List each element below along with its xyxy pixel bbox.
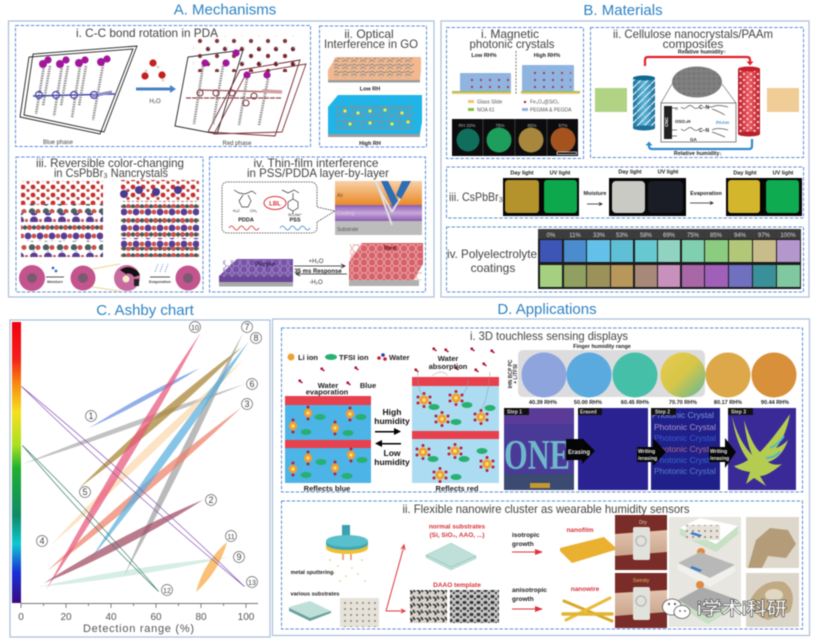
photo: Step 2 Photonic Crystal writing: Photonic Cryst <box>654 455 710 465</box>
diagram: low humidity device reflecting blue: evaporation <box>306 388 349 396</box>
numbered material markers <box>36 322 262 596</box>
heading: Cellulose nanocrystals composites: composites <box>663 37 723 51</box>
heading: Cellulose nanocrystals composites <box>613 27 773 51</box>
panel: B Materials frame <box>441 21 809 297</box>
colour grid: RH 0 to 100 percent: 53% <box>616 233 629 239</box>
heading: Magnetic photonic crystals <box>470 27 554 51</box>
photo: Step 2 Photonic Crystal writing: Step 2 <box>655 410 670 416</box>
diagram: chemical structure inset: C−N <box>699 128 710 134</box>
arrow: Writing erasing 1 <box>637 438 666 466</box>
label: Relative humidity up: Relative humidity↑ <box>678 50 726 56</box>
label: isotropic growth: isotropic <box>512 532 540 539</box>
sub-panel: B-ii Cellulose nanocrystals/PAAm <box>590 27 804 158</box>
icon: sputtering target <box>326 525 368 582</box>
label: Reflects blue: Reflects blue <box>304 484 350 493</box>
colour grid: RH 0 to 100 percent: 75% <box>687 233 700 239</box>
diagram: thin-film layers with light beams: Coating <box>337 211 354 217</box>
arrow: Writing erasing 1: /erasing <box>638 456 657 462</box>
diagram: purple film: Purple <box>255 261 275 268</box>
diagram: high and low humidity arrows: Low <box>384 448 401 458</box>
diagram: normal substrate <box>426 543 476 570</box>
colour grid: RH 0 to 100 percent: 97% <box>758 233 771 239</box>
photos: colour at four RH levels: 75% <box>495 123 505 128</box>
callout: PDDA and PSS chemical structures <box>222 182 335 233</box>
callout: PDDA and PSS chemical structures: PDDA <box>238 218 254 224</box>
arrow: Writing erasing 2: Writing <box>710 449 727 455</box>
panel: A Mechanisms frame <box>8 21 434 297</box>
heading: Flexible nanowire cluster: ii. Flexible nanowire cluster as wearable humidity sensors <box>402 502 690 516</box>
label: H2O: H₂O <box>149 99 161 105</box>
sub-panel: B-iii CsPbBr3 <box>446 167 804 218</box>
heading: C-C bond rotation: i. C-C bond rotation in PDA <box>76 26 218 40</box>
legend: Li ion, TFSI ion, water: TFSI ion <box>339 353 369 362</box>
heading: Thin-film interference: in PSS/PDDA layer-by-layer <box>247 166 389 180</box>
arrow: Writing erasing 2 <box>709 438 736 468</box>
diagram: high humidity device reflecting red: Water <box>438 354 458 363</box>
chart: finger humidity colour circles: 60.45 RH% <box>621 400 649 406</box>
photo: Step 3 eagle: Step 3 <box>731 410 746 416</box>
callout: PDDA and PSS chemical structures: H₃C <box>233 209 240 213</box>
label: Reflects red: Reflects red <box>436 484 479 493</box>
diagram: low humidity device reflecting blue: Water <box>318 381 338 390</box>
arrow: anisotropic <box>512 606 543 612</box>
chart outline leaf 13 <box>19 384 247 589</box>
diagram: chemical structure inset: O <box>675 106 678 111</box>
arrow: red humidity increase <box>645 57 754 66</box>
diagram: low humidity device reflecting blue <box>285 366 376 483</box>
label: anisotropic growth: growth <box>512 596 534 603</box>
legend: Li ion, TFSI ion, water <box>288 353 410 362</box>
photo: Step 2 Photonic Crystal writing: Photonic Crystal <box>654 433 716 443</box>
chart: finger humidity colour circles: + LiTFSI <box>513 364 519 384</box>
diagram: high and low humidity arrows: humidity <box>374 457 410 467</box>
labels: Day light and UV light: Day light <box>733 170 757 176</box>
photo: Step 1 ONE display <box>504 408 574 490</box>
numbered material markers: 13 <box>248 580 256 587</box>
labels: Day light and UV light: UV light <box>658 170 679 176</box>
chart: finger humidity colour circles: 50.00 RH% <box>574 400 602 406</box>
numbered material markers: 6 <box>249 379 255 389</box>
heading: Polyelectrolyte coatings <box>447 247 537 275</box>
sub-panel: B-i Magnetic photonic crystals <box>446 27 584 158</box>
photos: colour at four RH levels: 85% <box>527 123 537 128</box>
diagram: high and low humidity arrows <box>374 407 410 467</box>
x axis: Detection range (%) <box>83 623 194 635</box>
diagram: chemical structure inset: OSO₃H <box>675 119 690 124</box>
arrow: Writing erasing 2: /erasing <box>710 456 729 462</box>
micrograph: cellulose surface <box>661 66 736 103</box>
arrow: blue humidity decrease <box>646 139 752 149</box>
panel heading: A. Mechanisms: A. Mechanisms <box>174 2 276 18</box>
numbered material markers: 11 <box>227 534 235 541</box>
legend: materials <box>468 100 572 114</box>
sub-panel: A-i C-C bond rotation in PDA <box>16 26 310 147</box>
diagram: nanofilm <box>560 537 615 563</box>
diagram: blue phase lattice <box>20 46 137 134</box>
x axis <box>18 603 258 635</box>
arrow: Moisture: Moisture <box>584 191 606 197</box>
diagram: purple film <box>219 259 293 286</box>
callout: PDDA and PSS chemical structures: CH₃ <box>250 209 257 213</box>
photo: Step 2 Photonic Crystal writing: Photonic Crystal <box>654 422 716 432</box>
arrow: Moisture <box>584 191 606 206</box>
photo: Step 2 Photonic Crystal writing: Photonic Crystal <box>654 466 716 476</box>
label: DAAO template: DAAO template <box>433 582 481 589</box>
diagram: high and low humidity arrows: High <box>383 407 401 417</box>
diagram: nanowire rods <box>563 598 612 621</box>
heading: Optical interference: ii. Optical <box>344 27 394 41</box>
x axis: 80 <box>195 612 207 623</box>
photos: wrist sensor dry and sweaty: Dry <box>639 520 647 526</box>
sub-panel: A-ii Optical interference in GO <box>320 26 426 147</box>
colour grid: RH 0 to 100 percent: 0% <box>547 233 556 239</box>
diagram: nanocrystal moisture and evaporation cycle: Evaporation <box>149 280 172 284</box>
label: Red phase: Red phase <box>222 141 252 147</box>
diagram: chemical structure inset: C−N <box>699 105 710 111</box>
swatch: orange film <box>767 88 799 112</box>
watermark: WeChat logo and name <box>662 599 787 619</box>
diagram: red phase lattice <box>175 36 306 136</box>
label: normal substrates: normal substrates <box>429 524 486 530</box>
divider: low versus high humidity <box>515 51 517 94</box>
diagram: GO low RH <box>328 57 421 82</box>
label: normal substrates <box>429 524 486 539</box>
colour grid: RH 0 to 100 percent: 100% <box>780 233 796 239</box>
heading: 3D touchless sensing displays: i. 3D touchless sensing displays <box>470 329 628 343</box>
numbered material markers: 10 <box>191 325 199 332</box>
labels: Day light and UV light: Day light <box>618 170 642 176</box>
arrow: Evaporation <box>690 191 723 204</box>
legend: Li ion, TFSI ion, water: Water <box>389 353 410 362</box>
panel heading: D. Applications: D. Applications <box>497 301 597 318</box>
diagram: nanocrystal moisture and evaporation cycle <box>19 264 200 291</box>
arrows: reversible 35 ms response: 35 ms Response <box>294 269 342 275</box>
chart: finger humidity colour circles <box>508 350 796 406</box>
labels: Day light and UV light: UV light <box>773 170 794 176</box>
photos: after evaporation <box>726 178 802 216</box>
label: Low RH: Low RH <box>360 86 380 92</box>
colour grid: RH 0 to 100 percent: 85% <box>710 233 723 239</box>
label: anisotropic growth: anisotropic <box>512 587 547 594</box>
diagram: chemical structure inset <box>661 103 736 142</box>
heading: Polyelectrolyte coatings: iv. Polyelectrolyte <box>447 247 537 261</box>
photo: Step 2 Photonic Crystal writing: Photonic Crystal <box>652 410 714 420</box>
colour grid: RH 0 to 100 percent: 94% <box>734 233 747 239</box>
diagram: crystal structure with water <box>21 181 103 257</box>
heading: Thin-film interference <box>247 156 389 180</box>
numbered material markers: 8 <box>253 333 259 343</box>
chart: finger humidity colour circles: 40.39 RH% <box>529 400 557 406</box>
diagram: chemical structure inset: PAAm <box>716 120 729 125</box>
chart outline leaf 12 <box>20 444 161 593</box>
diagram: nanocrystal moisture and evaporation cycle: Moisture <box>47 280 63 284</box>
heading: Polyelectrolyte coatings: coatings <box>471 261 515 275</box>
diagram: low humidity device reflecting blue: Blue <box>360 381 376 390</box>
labels: Day light and UV light: Day light <box>510 170 534 176</box>
x axis: 20 <box>60 612 72 623</box>
sub-panel: A-iii Reversible colour changing <box>16 156 203 292</box>
legend: materials: Glass Slide <box>477 100 503 106</box>
x axis: 0 <box>18 612 24 623</box>
label: isotropic growth: growth <box>512 541 534 548</box>
heading: Reversible color-changing: iii. Reversible color-changing <box>36 156 184 170</box>
photo: Step 1 ONE display: ONE <box>504 433 570 479</box>
heading: Magnetic photonic crystals: photonic crystals <box>470 37 554 51</box>
sub-panel: D-ii Flexible nanowire cluster <box>282 501 802 629</box>
diagram: chemical structure inset: GA <box>690 137 698 142</box>
heading: Reversible color-changing <box>36 156 184 180</box>
diagram: high humidity device reflecting red: absorption <box>429 362 468 371</box>
diagram: high and low humidity arrows: humidity <box>374 416 410 426</box>
diagram: thin-film layers with light beams: Air <box>337 193 343 199</box>
diagram: blue cellulose cylinder <box>633 76 655 130</box>
diagram: chemical structure inset: CNC <box>664 116 669 127</box>
label: Low RH%: Low RH% <box>471 53 497 59</box>
label: isotropic growth <box>512 532 540 548</box>
photo: Step 1 ONE display: Step 1 <box>507 410 522 416</box>
colour grid: RH 0 to 100 percent <box>538 229 801 289</box>
diagram: red film: Red <box>384 245 396 252</box>
label: nanofilm: nanofilm <box>566 527 594 534</box>
chart: finger humidity colour circles: 80.17 RH% <box>714 400 742 406</box>
diagram: dehydrated crystal structure <box>120 180 199 257</box>
arrow: Erasing: Erasing <box>568 450 590 456</box>
labels: Day light and UV light: UV light <box>550 170 571 176</box>
legend: materials: PEGMA & PEGDA <box>530 108 572 114</box>
chart: Ashby detection range <box>12 322 262 635</box>
photos: after moisture <box>609 178 686 216</box>
colour scale bar <box>12 322 21 603</box>
photos: wrist sensor dry and sweaty: Sweaty <box>633 578 650 584</box>
photo: Step 2 Photonic Crystal writing <box>651 408 720 490</box>
legend: materials: NOA 61 <box>477 108 495 114</box>
label: Relative humidity down: Relative humidity↓ <box>674 151 722 157</box>
micrographs: DAAO <box>410 590 499 623</box>
label: Blue phase: Blue phase <box>43 140 74 146</box>
diagram: layered device exploded view <box>669 517 741 627</box>
diagram: thin-film layers with light beams: Substrate <box>337 227 359 233</box>
diagram: red film <box>349 243 423 286</box>
arrow: isotropic <box>512 549 543 555</box>
colour grid: RH 0 to 100 percent: 33% <box>593 233 606 239</box>
callout: PDDA and PSS chemical structures: PSS <box>289 218 301 224</box>
x axis: 60 <box>150 612 162 623</box>
heading: CsPbBr3: iii. CsPbBr₃ <box>449 190 503 204</box>
photos: colour at four RH levels: 97% <box>558 123 568 128</box>
panel: C Ashby chart frame <box>10 320 270 637</box>
photos: hands <box>746 517 799 627</box>
numbered material markers: 12 <box>163 588 171 595</box>
label: anisotropic growth <box>512 587 547 603</box>
arrow: Writing erasing 1: Writing <box>638 449 655 455</box>
label: metal sputtering: metal sputtering <box>291 570 333 576</box>
panel heading: B. Materials: B. Materials <box>583 2 663 19</box>
diagram: high humidity device reflecting red <box>412 348 499 483</box>
arrow: Erasing <box>566 438 595 464</box>
arrows: reversible 35 ms response <box>294 259 347 286</box>
labels: Day light and UV light <box>510 170 794 176</box>
chart leaves: material ranges <box>22 330 252 594</box>
sub-panel: A-iv Thin-film interference <box>210 156 426 292</box>
photo: Erased display: Erased <box>580 410 597 416</box>
heading: Optical interference <box>324 27 418 51</box>
numbered material markers: 9 <box>236 552 242 562</box>
colour grid: RH 0 to 100 percent: 69% <box>663 233 676 239</box>
callout: PDDA and PSS chemical structures: LBL <box>269 202 281 208</box>
watermark: WeChat logo and name: i学术i科研 <box>697 599 787 619</box>
photo: Step 2 Photonic Crystal writing: Photonic Cryst <box>654 444 710 454</box>
label: various substrates: various substrates <box>291 592 339 598</box>
legend: materials: Fe₃O₄@SiO₂ <box>530 100 559 106</box>
numbered material markers: 2 <box>208 495 214 505</box>
numbered material markers: 4 <box>39 536 45 546</box>
x axis: 40 <box>105 612 117 623</box>
swatch: green film <box>595 88 627 112</box>
sub-panel: B-iv Polyelectrolyte coatings <box>446 227 804 292</box>
diagram: red cellulose cylinder <box>738 66 760 136</box>
legend: Li ion, TFSI ion, water: Li ion <box>298 353 318 362</box>
chart: finger humidity colour circles: 90.44 RH% <box>761 400 789 406</box>
numbered material markers: 5 <box>82 487 88 497</box>
photo: Erased display <box>578 408 648 490</box>
heading: Thin-film interference: iv. Thin-film interference <box>254 156 379 170</box>
arrow: H2O transition <box>136 85 176 93</box>
label: nanowire: nanowire <box>571 586 600 593</box>
icon: water molecules <box>141 59 166 82</box>
numbered material markers: 7 <box>244 322 250 332</box>
panel heading: C. Ashby chart: C. Ashby chart <box>96 302 195 319</box>
diagram: GO high RH <box>328 95 422 137</box>
heading: Optical interference: Interference in GO <box>324 37 418 51</box>
label: normal substrates: (Si, SiO₂, AAO, ...) <box>429 532 485 539</box>
arrows: reversible 35 ms response: -H₂O <box>309 280 323 286</box>
photos: wrist sensor dry and sweaty <box>615 515 667 628</box>
arrows: reversible 35 ms response: +H₂O <box>309 259 324 265</box>
x axis: 100 <box>238 612 255 623</box>
numbered material markers: 3 <box>244 399 250 409</box>
colour grid: RH 0 to 100 percent: 11% <box>569 233 581 239</box>
photos: colour at four RH levels <box>452 119 578 156</box>
chart: finger humidity colour circles: IHN BCP PC <box>508 359 514 388</box>
colour grid: RH 0 to 100 percent: 58% <box>640 233 653 239</box>
callout: PDDA and PSS chemical structures: SO₃Na⁺ <box>288 213 302 217</box>
photos: before moisture <box>503 178 579 216</box>
photo: Step 3 eagle <box>728 408 796 490</box>
label: High RH%: High RH% <box>534 53 560 59</box>
photos: colour at four RH levels: RH 33% <box>459 123 475 128</box>
label: Finger humidity range: Finger humidity range <box>573 344 631 350</box>
diagram: swelling photonic crystal <box>452 65 580 94</box>
panel: D Applications frame <box>272 319 810 636</box>
sub-panel: D-i 3D touchless sensing displays <box>282 328 802 493</box>
arrow: Evaporation: Evaporation <box>690 191 723 197</box>
heading: Reversible color-changing: in CsPbBr₃ Nancrystals <box>54 166 168 180</box>
diagram: thin-film layers with light beams <box>335 181 422 235</box>
label: High RH: High RH <box>359 141 381 147</box>
numbered material markers: 1 <box>88 411 94 421</box>
heading: Cellulose nanocrystals composites: ii. Cellulose nanocrystals/PAAm <box>613 27 773 41</box>
heading: Magnetic photonic crystals: i. Magnetic <box>481 27 539 41</box>
diagram: substrates <box>289 598 379 627</box>
arrows: red growth paths <box>386 545 405 613</box>
chart: finger humidity colour circles: 70.70 RH% <box>669 400 697 406</box>
